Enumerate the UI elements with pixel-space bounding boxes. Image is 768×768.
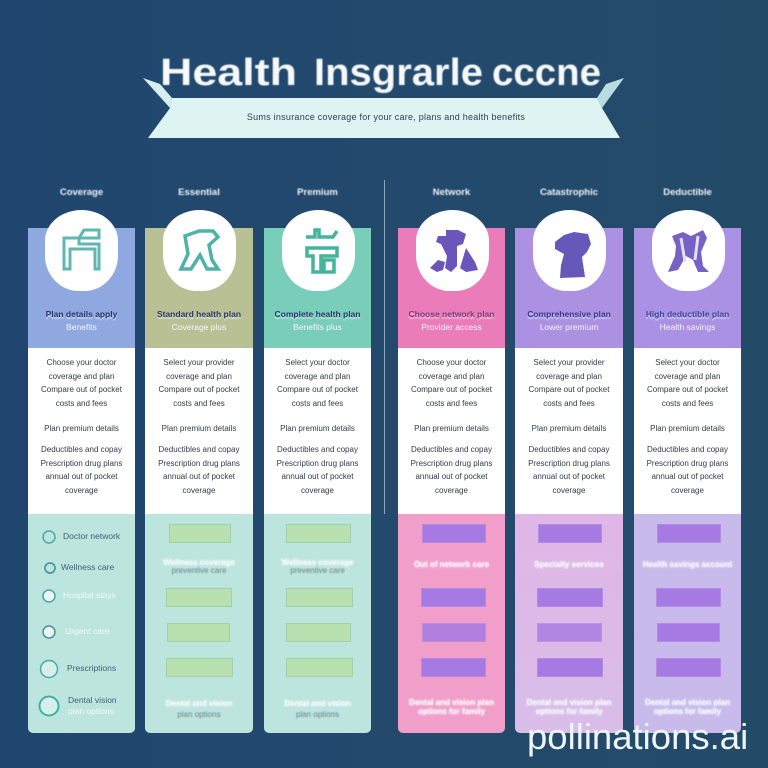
column 1 body text: Plan premium details xyxy=(44,424,119,433)
column 4 body text: Compare out of pocket xyxy=(411,385,492,394)
column 3 feature bars: plan options xyxy=(296,710,339,719)
column 1 header xyxy=(28,228,135,348)
column 4 body text: coverage xyxy=(435,486,468,494)
column 5 body text: annual out of pocket xyxy=(533,472,605,481)
column 5 feature bars: Specialty services xyxy=(534,560,604,569)
column 6 heading xyxy=(646,309,730,332)
column 6 body text: Prescription drug plans xyxy=(647,458,728,468)
column 1 body text: costs and fees xyxy=(56,398,107,408)
column 3 body text: costs and fees xyxy=(292,398,343,408)
column 5 body text: Prescription drug plans xyxy=(528,458,610,468)
title: Insgrarle xyxy=(314,52,483,94)
column 1 heading xyxy=(46,309,118,332)
column 3 icon xyxy=(282,210,355,291)
column 1 body text: coverage and plan xyxy=(49,372,114,380)
column 4 heading: Provider access xyxy=(421,322,482,332)
column 2 feature bars xyxy=(145,514,253,733)
column 1 body text xyxy=(28,348,135,514)
column 4 body text: coverage and plan xyxy=(419,372,484,380)
column 2 heading: Standard health plan xyxy=(157,309,241,319)
column 4 body text: Choose your doctor xyxy=(417,358,486,367)
column 1 body text: Choose your doctor xyxy=(47,358,116,367)
title: cccne xyxy=(492,52,601,94)
column 2 feature bars: Wellness coverage xyxy=(163,558,235,567)
column 5 body text: Select your provider xyxy=(533,358,605,367)
column 3 heading: Complete health plan xyxy=(275,309,360,319)
column 4 feature bars: Out of network care xyxy=(414,560,489,569)
column 4 feature bars: options for family xyxy=(418,707,485,716)
center divider xyxy=(384,180,385,514)
feature row 1: Doctor network xyxy=(63,531,120,541)
column 5 feature bars: Dental and vision plan xyxy=(527,698,611,707)
column 2 label: Essential xyxy=(178,187,220,198)
column 4 heading: Choose network plan xyxy=(409,309,494,319)
column 2 xyxy=(145,187,253,733)
column 6 heading: High deductible plan xyxy=(646,309,729,319)
feature row 4 xyxy=(42,625,109,639)
column 3 feature bars: preventive care xyxy=(290,566,345,575)
column 5 body text: Plan premium details xyxy=(532,424,606,433)
column 3 body text: annual out of pocket xyxy=(281,472,354,481)
column 3 body text: Select your doctor xyxy=(285,358,350,367)
feature row 6: Dental vision xyxy=(68,695,117,705)
title xyxy=(160,52,601,94)
column 4 body text xyxy=(398,348,505,514)
column 4 header xyxy=(398,228,505,348)
column 3 xyxy=(264,187,371,733)
column 4 feature bars: Dental and vision plan xyxy=(409,698,494,707)
column 4 body text: annual out of pocket xyxy=(415,472,488,481)
column 3 body text: Plan premium details xyxy=(280,424,355,433)
column 2 body text: coverage and plan xyxy=(166,372,232,380)
column 2 body text: Prescription drug plans xyxy=(158,458,240,468)
feature row 3: Hospital stays xyxy=(63,590,116,600)
watermark: pollinations.ai xyxy=(527,716,748,757)
column 3 body text: Compare out of pocket xyxy=(277,385,358,394)
column 3 body text xyxy=(264,348,371,514)
column 2 body text: Select your provider xyxy=(163,358,235,367)
column 6 feature bars xyxy=(634,514,741,733)
column 6 body text: coverage xyxy=(671,486,704,494)
column 1 body text: Prescription drug plans xyxy=(41,458,122,468)
column 2 icon xyxy=(163,210,236,291)
column 2 feature bars: plan options xyxy=(177,710,221,719)
column 5 body text: Deductibles and copay xyxy=(529,445,609,454)
feature row 2: Wellness care xyxy=(61,562,114,572)
column 4 feature bars xyxy=(398,514,505,733)
column 6 body text: costs and fees xyxy=(662,398,713,408)
column 4 icon xyxy=(416,210,489,291)
column 5 feature bars: options for family xyxy=(535,707,603,716)
column 2 feature bars: preventive care xyxy=(172,566,226,575)
column 3 body text: Prescription drug plans xyxy=(277,458,358,468)
column 3 heading xyxy=(274,309,360,332)
column 2 body text: costs and fees xyxy=(173,398,225,408)
title: Health xyxy=(160,52,297,94)
column 3 body text: coverage and plan xyxy=(285,372,350,380)
column 2 body text: Compare out of pocket xyxy=(159,385,239,394)
column 6 body text: Compare out of pocket xyxy=(647,385,728,394)
column 1 body text: annual out of pocket xyxy=(45,472,118,481)
column 3 feature bars: Wellness coverage xyxy=(282,558,353,567)
column 2 body text: annual out of pocket xyxy=(163,472,235,481)
column 6 header xyxy=(634,228,741,348)
column 6 body text: coverage and plan xyxy=(655,372,720,380)
column 2 body text: Plan premium details xyxy=(162,424,236,433)
column 4 body text: Plan premium details xyxy=(414,424,489,433)
column 3 body text: Deductibles and copay xyxy=(277,445,358,454)
column 2 heading: Coverage plus xyxy=(172,322,226,332)
column 4 body text: costs and fees xyxy=(426,398,477,408)
column 5 label: Catastrophic xyxy=(540,187,598,198)
column 6 body text: Deductibles and copay xyxy=(647,445,728,454)
column 6 body text: Plan premium details xyxy=(650,424,725,433)
feature row 6 xyxy=(38,695,117,716)
column 4 label: Network xyxy=(433,187,470,198)
column 2 body text: coverage xyxy=(183,486,215,494)
column 1 heading: Plan details apply xyxy=(46,309,117,319)
feature row 2 xyxy=(44,562,114,574)
column 1 label: Coverage xyxy=(60,187,103,198)
column 6 body text: Select your doctor xyxy=(655,358,720,367)
column 1 heading: Benefits xyxy=(66,322,97,332)
column 6 body text: annual out of pocket xyxy=(651,472,724,481)
column 6 body text xyxy=(634,348,741,514)
column 2 heading xyxy=(157,309,241,332)
column 2 header xyxy=(145,228,253,348)
column 3 heading: Benefits plus xyxy=(293,322,342,332)
column 1 feature list xyxy=(28,514,135,733)
column 5 heading: Comprehensive plan xyxy=(527,309,611,319)
column 4 body text: Deductibles and copay xyxy=(411,445,492,454)
column 5 xyxy=(515,187,623,733)
column 5 heading xyxy=(527,309,611,332)
column 6 feature bars: Health savings account xyxy=(643,560,732,569)
column 2 body text: Deductibles and copay xyxy=(159,445,239,454)
column 1 xyxy=(28,187,135,733)
column 5 body text: coverage and plan xyxy=(536,372,602,380)
column 4 heading xyxy=(408,309,494,332)
column 5 heading: Lower premium xyxy=(540,322,598,332)
column 3 feature bars xyxy=(264,514,371,733)
feature row 1 xyxy=(42,530,120,544)
column 5 icon xyxy=(533,210,606,291)
column 3 header xyxy=(264,228,371,348)
feature row 5: Prescriptions xyxy=(67,663,116,673)
column 5 feature bars xyxy=(515,514,623,733)
column 2 feature bars: Dental and vision xyxy=(166,699,232,708)
column 6 label: Deductible xyxy=(663,187,712,198)
column 4 body text: Prescription drug plans xyxy=(411,458,492,468)
column 1 body text: coverage xyxy=(65,486,98,494)
column 5 body text: Compare out of pocket xyxy=(529,385,609,394)
column 1 body text: Deductibles and copay xyxy=(41,445,122,454)
column 6 xyxy=(634,187,741,733)
feature row 5 xyxy=(40,660,116,678)
column 5 header xyxy=(515,228,623,348)
column 6 feature bars: Dental and vision plan xyxy=(645,698,730,707)
subtitle: Sums insurance coverage for your care, plans and health benefits xyxy=(247,112,525,122)
column 3 body text: coverage xyxy=(301,486,334,494)
column 1 body text: Compare out of pocket xyxy=(41,385,122,394)
feature row 4: Urgent care xyxy=(65,626,109,636)
feature row 6: plan options xyxy=(68,706,114,716)
title banner xyxy=(143,78,624,138)
column 4 xyxy=(398,187,505,733)
column 6 feature bars: options for family xyxy=(654,707,721,716)
column 5 body text: coverage xyxy=(553,486,585,494)
column 6 icon xyxy=(652,210,725,291)
column 5 body text: costs and fees xyxy=(543,398,595,408)
column 6 heading: Health savings xyxy=(660,322,715,332)
column 2 body text xyxy=(145,348,253,514)
column 3 feature bars: Dental and vision xyxy=(284,699,351,708)
column 5 body text xyxy=(515,348,623,514)
column 3 label: Premium xyxy=(297,187,338,198)
column 1 icon xyxy=(45,210,118,291)
feature row 3 xyxy=(42,589,116,603)
